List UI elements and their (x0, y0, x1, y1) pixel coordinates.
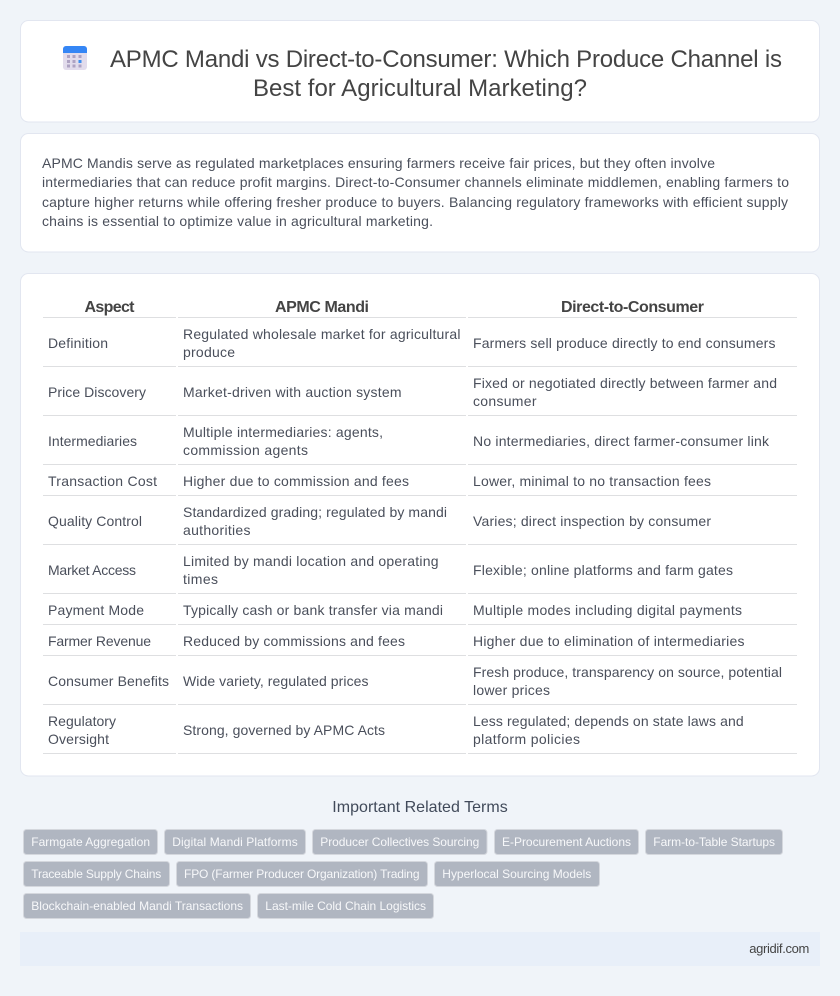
table row: intermediaries (48, 424, 770, 458)
footer bar (20, 932, 820, 966)
panel: comparison table (20, 274, 820, 776)
chip: farm-to-table startups (646, 830, 782, 854)
table row: price discovery: Market-driven with auction system (183, 384, 402, 400)
table row: farmer revenue: Reduced by commissions and fees (183, 633, 405, 649)
chip: producer collectives sourcing: Producer Collectives Sourcing (320, 835, 479, 849)
table row: market access (48, 553, 733, 587)
table row: quality control (48, 504, 711, 538)
table row: quality control: Quality Control (48, 513, 142, 529)
table header row: APMC Mandi (275, 299, 369, 316)
table row: price discovery: consumer (473, 393, 537, 409)
table row: definition: Regulated wholesale market for agricultural (183, 326, 460, 342)
table header row: Direct-to-Consumer (561, 299, 704, 316)
table row: transaction cost: Lower, minimal to no transaction fees (473, 473, 711, 489)
table row: transaction cost: Higher due to commission and fees (183, 473, 409, 489)
table row: market access: Flexible; online platforms and farm gates (473, 562, 733, 578)
table row: regulatory oversight: Strong, governed by APMC Acts (183, 722, 385, 738)
table row: consumer benefits: Consumer Benefits (48, 673, 169, 689)
table row: transaction cost: Transaction Cost (48, 473, 157, 489)
table row: intermediaries: No intermediaries, direct farmer-consumer link (473, 433, 770, 449)
text block: intro paragraph: chains is essential to optimize value in agricultural marketing. (42, 213, 433, 229)
table row: regulatory oversight: Regulatory (48, 713, 116, 729)
table row: consumer benefits: lower prices (473, 682, 550, 698)
table row: definition: Farmers sell produce directly to end consumers (473, 335, 776, 351)
table row: payment mode: Typically cash or bank transfer via mandi (183, 602, 443, 618)
chip: last-mile cold chain logistics (258, 894, 434, 918)
table row: farmer revenue: Farmer Revenue (48, 633, 151, 649)
title (110, 46, 782, 102)
chip: digital mandi platforms: Digital Mandi Platforms (172, 835, 298, 849)
chip: digital mandi platforms (164, 830, 306, 854)
table row: regulatory oversight: platform policies (473, 731, 580, 747)
title: Best for Agricultural Marketing? (253, 75, 587, 102)
table row: definition (48, 326, 776, 360)
text block: intro paragraph: APMC Mandis serve as regulated marketplaces ensuring farmers receive fair prices, but they often involve (42, 155, 715, 171)
panel: related term chips (24, 830, 782, 918)
table row: regulatory oversight: Oversight (48, 731, 109, 747)
table row: price discovery: Fixed or negotiated directly between farmer and (473, 375, 777, 391)
chip: traceable supply chains (24, 862, 170, 886)
table row: regulatory oversight: Less regulated; depends on state laws and (473, 713, 744, 729)
table row: consumer benefits (48, 664, 782, 698)
table row: price discovery: Price Discovery (48, 384, 146, 400)
chip: blockchain-enabled mandi transactions (24, 894, 250, 918)
table header row (84, 299, 704, 316)
chip: e-procurement auctions: E-Procurement Auctions (502, 835, 631, 849)
chip: producer collectives sourcing (312, 830, 487, 854)
chip: blockchain-enabled mandi transactions: Blockchain-enabled Mandi Transactions (31, 899, 243, 913)
table row: price discovery (48, 375, 777, 409)
chip: hyperlocal sourcing models (434, 862, 600, 886)
table row: farmer revenue: Higher due to elimination of intermediaries (473, 633, 744, 649)
table row: quality control: Standardized grading; regulated by mandi (183, 504, 447, 520)
table row: consumer benefits: Fresh produce, transparency on source, potential (473, 664, 782, 680)
chip: traceable supply chains: Traceable Supply Chains (31, 867, 161, 881)
table row: quality control: authorities (183, 522, 250, 538)
table row: quality control: Varies; direct inspection by consumer (473, 513, 711, 529)
table row: regulatory oversight (48, 713, 744, 747)
chip: farmgate aggregation: Farmgate Aggregation (31, 835, 150, 849)
table row: definition: produce (183, 344, 235, 360)
text block: intro paragraph: intermediaries that can reduce profit margins. Direct-to-Consumer channels eliminate middlemen, enabling farmers to (42, 174, 789, 190)
chip: e-procurement auctions (494, 830, 638, 854)
table row: payment mode (48, 602, 742, 618)
table row: intermediaries: Intermediaries (48, 433, 137, 449)
table row: consumer benefits: Wide variety, regulated prices (183, 673, 368, 689)
chip: last-mile cold chain logistics: Last-mile Cold Chain Logistics (265, 899, 426, 913)
chip: fpo trading (176, 862, 428, 886)
text block: intro paragraph: capture higher returns while offering fresher produce to buyers. Balancing regulatory frameworks with efficient supply (42, 194, 788, 210)
heading: important related terms: Important Related Terms (332, 799, 508, 816)
table header row: Aspect (84, 299, 135, 316)
table row: intermediaries: commission agents (183, 442, 308, 458)
table row: payment mode: Payment Mode (48, 602, 144, 618)
chip: farmgate aggregation (24, 830, 158, 854)
chip: hyperlocal sourcing models: Hyperlocal Sourcing Models (442, 867, 591, 881)
title: APMC Mandi vs Direct-to-Consumer: Which Produce Channel is (110, 46, 782, 73)
table row: farmer revenue (48, 633, 744, 649)
footer source text: agridif.com (749, 941, 809, 956)
table row: definition: Definition (48, 335, 108, 351)
chip: farm-to-table startups: Farm-to-Table Startups (653, 835, 775, 849)
text block: intro paragraph (42, 155, 789, 229)
table row: payment mode: Multiple modes including digital payments (473, 602, 742, 618)
chip: fpo trading: FPO (Farmer Producer Organization) Trading (184, 867, 420, 881)
table row: market access: times (183, 571, 218, 587)
table row: transaction cost (48, 473, 711, 489)
table row: market access: Market Access (48, 562, 136, 578)
icon: calendar (63, 46, 87, 70)
table row: market access: Limited by mandi location and operating (183, 553, 438, 569)
panel: introduction (20, 134, 820, 252)
table row: intermediaries: Multiple intermediaries: agents, (183, 424, 383, 440)
panel: title header (20, 20, 820, 122)
